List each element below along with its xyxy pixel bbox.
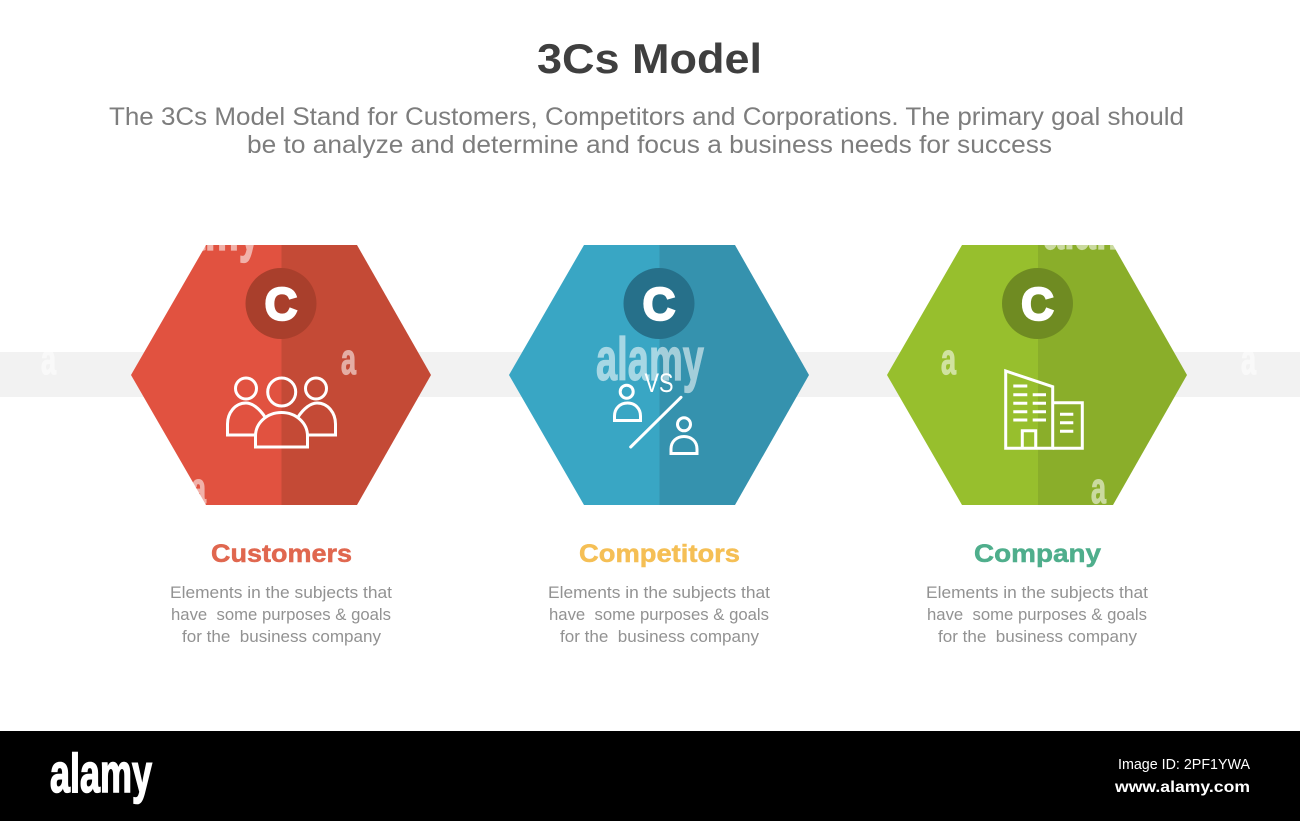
watermark: small marks: alamy: [1043, 195, 1151, 262]
watermark: small marks: a: [941, 335, 956, 384]
watermark: small marks: [41, 195, 1256, 513]
title: 3Cs Model: [537, 35, 762, 82]
text: company description: [926, 583, 1148, 646]
text: customers description: [170, 583, 392, 646]
text: company description: have some purposes & goals: [927, 605, 1147, 624]
icon: person versus person: [614, 368, 697, 454]
text: competitors description: for the business company: [560, 627, 759, 646]
text: competitors description: have some purposes & goals: [549, 605, 769, 624]
text: customers description: Elements in the subjects that: [170, 583, 392, 602]
badge: company C: [1002, 268, 1073, 339]
badge: company C: C: [1021, 278, 1054, 330]
icon: person versus person: VS: [644, 368, 674, 398]
watermark: small marks: a: [1091, 464, 1106, 513]
watermark: alamy: alamy: [596, 326, 704, 393]
footer image id: Image ID: 2PF1YWA: [1118, 756, 1250, 773]
hexagon: customers: [131, 245, 431, 505]
heading: customers: Customers: [211, 540, 352, 568]
text: customers description: for the business company: [182, 627, 381, 646]
panel: customers: [131, 245, 431, 646]
hexagon: competitors: [509, 245, 809, 505]
hexagon: company: [887, 245, 1187, 505]
icon: group of people: [228, 378, 336, 447]
text: company description: Elements in the subjects that: [926, 583, 1148, 602]
heading: company: Company: [974, 540, 1101, 568]
text: company description: for the business company: [938, 627, 1137, 646]
footer url: www.alamy.com: [1114, 779, 1250, 796]
footer bar: [0, 731, 1300, 821]
text: customers description: have some purposes & goals: [171, 605, 391, 624]
panel: competitors: [509, 245, 809, 646]
badge: customers C: C: [265, 278, 297, 330]
connecting horizontal band: [0, 352, 1300, 397]
heading: competitors: Competitors: [579, 540, 740, 568]
watermark: small marks: alamy: [152, 196, 260, 263]
subtitle text block: [109, 103, 1184, 159]
text: competitors description: [548, 583, 770, 646]
badge: competitors C: C: [643, 278, 675, 330]
text: competitors description: Elements in the subjects that: [548, 583, 770, 602]
watermark: small marks: a: [341, 335, 356, 384]
badge: customers C: [246, 268, 316, 339]
watermark: small marks: a: [191, 464, 206, 513]
panel: company: [887, 245, 1187, 646]
icon: office buildings: [1006, 371, 1082, 448]
watermark: small marks: a: [1241, 335, 1256, 384]
subtitle text block: The 3Cs Model Stand for Customers, Competitors and Corporations. The primary goal should: [109, 103, 1184, 131]
subtitle text block: be to analyze and determine and focus a business needs for success: [247, 131, 1052, 159]
badge: competitors C: [624, 268, 694, 339]
footer logo: alamy: alamy: [50, 742, 152, 804]
watermark: small marks: a: [41, 335, 56, 384]
